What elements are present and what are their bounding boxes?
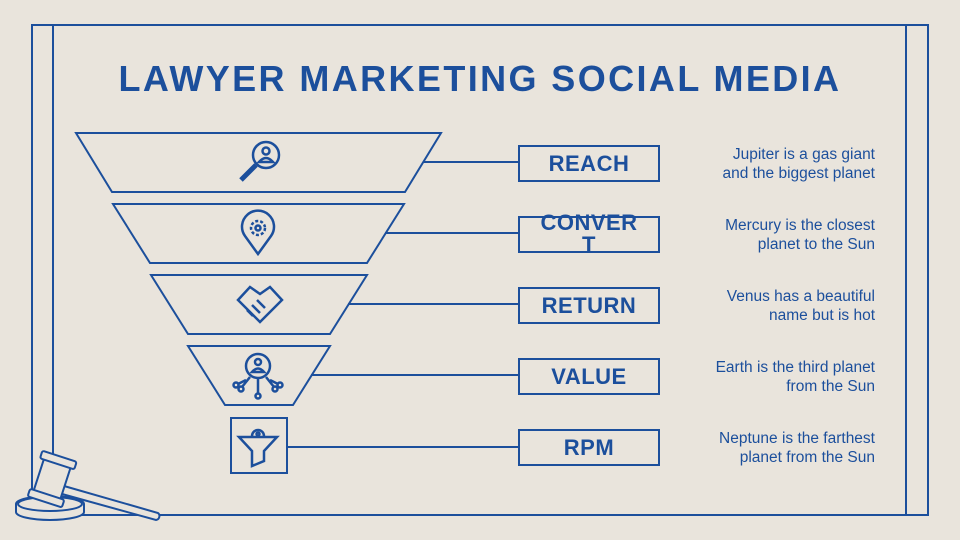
- label REACH: REACH: [549, 151, 629, 176]
- desc 3: Venus has a beautiful: [727, 288, 875, 305]
- funnel level 5: [231, 418, 518, 473]
- desc 3: [726, 288, 875, 324]
- desc 2: Mercury is the closest: [725, 217, 875, 234]
- funnel level 1: [76, 133, 518, 192]
- label VALUE: VALUE: [551, 364, 627, 389]
- desc 3: name but is hot: [769, 307, 875, 324]
- desc 5: Neptune is the farthest: [719, 430, 875, 447]
- desc 4: Earth is the third planet: [716, 359, 875, 376]
- funnel level 3: [151, 275, 518, 334]
- desc 5: [719, 430, 875, 466]
- desc 2: [725, 217, 875, 253]
- label CONVERT: T: [582, 232, 596, 257]
- icon: filter funnel: [239, 430, 277, 466]
- label RPM: [518, 429, 660, 466]
- label VALUE: [518, 358, 660, 395]
- icon: handshake: [238, 287, 282, 322]
- label REACH: [518, 145, 660, 182]
- desc 1: Jupiter is a gas giant: [733, 146, 875, 163]
- label CONVERT: [518, 216, 660, 253]
- icon: search person: [241, 142, 279, 180]
- desc 4: from the Sun: [786, 378, 875, 395]
- label RETURN: RETURN: [542, 293, 636, 318]
- desc 1: [722, 146, 875, 182]
- desc 5: planet from the Sun: [740, 449, 875, 466]
- funnel level 2: [113, 204, 518, 263]
- funnel level 4: [188, 346, 518, 405]
- label RPM: RPM: [564, 435, 614, 460]
- title: LAWYER MARKETING SOCIAL MEDIA: [119, 58, 841, 99]
- label RETURN: [518, 287, 660, 324]
- desc 1: and the biggest planet: [722, 165, 875, 182]
- desc 4: [716, 359, 875, 395]
- desc 2: planet to the Sun: [758, 236, 875, 253]
- label CONVERT: CONVER: [540, 210, 638, 235]
- icon: network person: [234, 354, 282, 398]
- icon: location gear: [242, 211, 274, 254]
